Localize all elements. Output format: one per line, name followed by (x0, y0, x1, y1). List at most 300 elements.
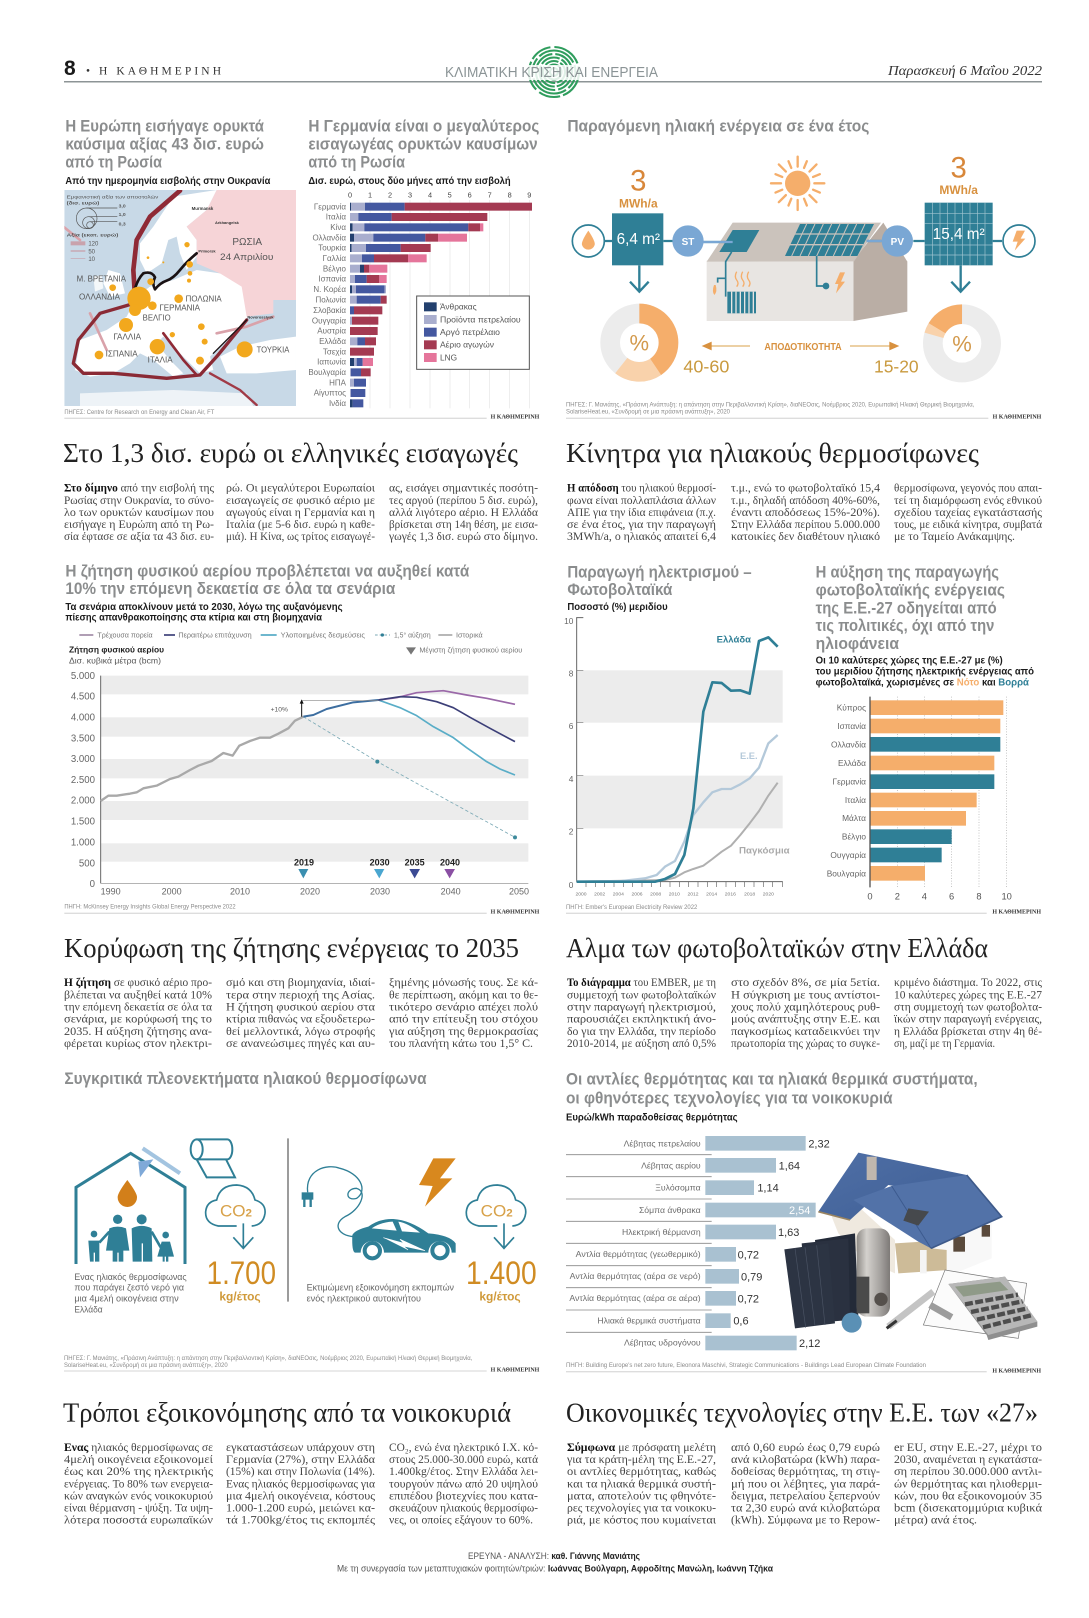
body text: ματα, αποτελούν τις φθηνότε- (567, 1490, 716, 1502)
line chart: 2010 (669, 891, 680, 897)
map: ΤΟΥΡΚΙΑ (257, 344, 290, 354)
headline: Οικονομικές τεχνολογίες στην Ε.Ε. των «27» (566, 1398, 1038, 1428)
bar chart: Βέλγιο (842, 831, 866, 841)
icon: lightning (1003, 225, 1035, 257)
value: 1.700 kg/year (207, 1255, 276, 1304)
body text: κών αναγκών ενός νοικοκυριού (64, 1490, 213, 1502)
map: ΓΑΛΛΙΑ (113, 331, 141, 341)
stacked bar chart: Γαλλία (323, 254, 346, 263)
line chart: 4.500 (71, 692, 95, 703)
bar chart: Ουγγαρία (830, 850, 866, 860)
heading: εισαγωγέας ορυκτών καυσίμων (308, 134, 538, 153)
footer: credit and rule: Η ΚΑΘΗΜΕΡΙΝΗ (491, 1367, 539, 1374)
body text: 2010-2014, με αύξηση από 0,5% (567, 1038, 716, 1050)
line chart: 2018 (744, 891, 755, 897)
body text: τες αργού (περίπου 5 δισ. ευρώ), (389, 495, 538, 507)
body text: δειγμα, πετρελαίου ξεπερνούν (731, 1490, 880, 1502)
headline: Κορύφωση της ζήτησης ενέργειας το 2035 (64, 933, 519, 963)
bar chart: Ολλανδία (831, 739, 866, 749)
line chart: 4.000 (71, 713, 95, 724)
caption: Ενας ηλιακός θερμοσίφωνας (74, 1272, 187, 1282)
footer: credit and rule: Η ΚΑΘΗΜΕΡΙΝΗ (992, 1368, 1041, 1375)
body text: Ρωσίας στην Ουκρανία, το σύνο- (64, 495, 214, 507)
bar chart: 1,64 (779, 1160, 800, 1172)
map: 24 Απριλίου (220, 252, 273, 262)
arrow (951, 265, 970, 292)
heading: καύσιμα αξίας 43 δισ. ευρώ (65, 134, 264, 153)
icon: house with family (76, 1148, 185, 1264)
article: household savings (63, 1398, 538, 1526)
line chart: 4 (569, 774, 574, 784)
subheading: Δισ. ευρώ, στους δύο μήνες από την εισβολή (308, 176, 511, 187)
icon: PV badge (882, 225, 913, 257)
legend: Αέριο αγωγών (440, 340, 494, 350)
body text: παρουσιάζει εκπληκτική άνο- (567, 1014, 716, 1026)
icon: ST badge (672, 225, 704, 257)
footer: credit and rule: Η ΚΑΘΗΜΕΡΙΝΗ (993, 414, 1041, 421)
bar chart: Λέβητας πετρελαίου (624, 1138, 701, 1148)
caption (307, 1283, 454, 1304)
line chart: 2000 (162, 887, 182, 897)
bar chart: Αντλία θερμότητας (αέρα σε αέρα) (569, 1293, 701, 1303)
stacked bar chart: Τσεχία (323, 347, 346, 356)
stacked bar chart: ΗΠΑ (329, 378, 347, 387)
legend: Ιστορικά (456, 631, 483, 639)
donut chart (599, 302, 680, 383)
caption: ενός ηλεκτρικού αυτοκινήτου (307, 1294, 421, 1304)
left column: solar thermal: 40-60 (683, 356, 729, 376)
body text: τ.μ., ενώ το φωτοβολταϊκό 15,4 (731, 483, 880, 495)
body text: σε ένα έτος, για την παραγωγή (567, 519, 716, 531)
heading: Παραγωγή ηλεκτρισμού – (567, 563, 752, 582)
left column: solar thermal (572, 165, 733, 383)
body text: έναντι αποδόσεως 15%-20%). (731, 507, 880, 519)
body text: την επόμενη δεκαετία σε όλα τα (64, 1002, 212, 1014)
caption: Ελλάδα (74, 1305, 103, 1315)
stacked bar chart: Ν. Κορέα (313, 285, 346, 294)
collector area: 6,4 m² (617, 231, 660, 248)
heading: από τη Ρωσία (65, 152, 163, 171)
body text: ών θερμότητας και ηλιοθερμι- (894, 1478, 1042, 1490)
collector area: 15,4 m² (933, 226, 985, 243)
line chart: 2014 (706, 891, 717, 897)
bar chart: Ελλάδα (838, 758, 866, 768)
credits (337, 1551, 773, 1574)
value: 1.400 kg/year (466, 1255, 537, 1304)
body text: ΑΠΕ για την ίδια επιφάνεια (π.χ. (567, 507, 716, 519)
heading (65, 117, 265, 171)
series labels: Ελλάδα (717, 634, 751, 644)
body text: er EU, στην Ε.Ε.-27, μέχρι το (894, 1442, 1042, 1454)
map: Μ. ΒΡΕΤΑΝΙΑ (77, 274, 126, 284)
right column: photovoltaic (867, 151, 1035, 383)
body text: Η ζήτηση σε φυσικό αέριο προ- (64, 976, 212, 989)
bar chart: Σόμπα άνθρακα (639, 1205, 701, 1215)
body text (567, 976, 1042, 1050)
heading: Φωτοβολταϊκά (567, 580, 673, 599)
headline: Στο 1,3 δισ. ευρώ οι ελληνικές εισαγωγές (63, 438, 518, 468)
body text: με το Ταμείο Ανάκαμψης. (894, 531, 1015, 543)
source: SolariseHeat.eu, «Συνδρομή σε μια πράσινη ανάπτυξη», 2020 (64, 1362, 228, 1369)
body text: ενέργειας. Το 80% των ενεργεια- (64, 1478, 213, 1490)
peak markers: 2035 (405, 858, 425, 868)
stacked bar chart: 0 (348, 190, 352, 199)
bar chart (566, 1136, 830, 1350)
body text: αλλά λιγότερο αέριο. Η Ελλάδα (389, 507, 538, 519)
body text (64, 1442, 538, 1526)
body text (567, 482, 1042, 543)
map: 0,3 (119, 221, 126, 227)
body text: πρωτοπορία της χώρας το συγκε- (731, 1038, 880, 1050)
body text: Ιταλία (με 5-6 δισ. ευρώ η καθε- (226, 519, 375, 531)
headline: Αλμα των φωτοβολταϊκών στην Ελλάδα (566, 933, 988, 963)
subheading: Από την ημερομηνία εισβολής στην Ουκρανία (65, 176, 271, 187)
body text: τικότερο σενάριο απέχει πολύ (389, 1002, 538, 1014)
line chart: 2 (569, 827, 574, 837)
source: ΠΗΓΗ: Building Europe's net zero future, Eleonora Maschivi, Strategic Communications - Buildings Lead European Climate Foundation (566, 1363, 926, 1369)
panel: cheapest technologies for households (566, 1069, 1041, 1375)
map: ΟΛΛΑΝΔΙΑ (79, 291, 120, 301)
stacked bar chart: 6 (468, 190, 472, 199)
heading: τις πολιτικές, όχι από την (816, 616, 994, 635)
icon: CO2 cloud and arrow (left): CO2 (220, 1202, 252, 1221)
body text: στο σχεδόν 8%, σε μία 5ετία. (731, 977, 880, 989)
caption: που παράγει ζεστό νερό για (74, 1283, 184, 1293)
body text: βρίσκεται στη 14η θέση, με εισα- (389, 519, 538, 531)
body text: 1.400kg/έτος. Στην Ελλάδα λει- (389, 1466, 538, 1478)
body text: φωνα είναι πολλαπλάσια άλλων (567, 495, 716, 507)
line chart (71, 671, 529, 897)
bar chart: 0,6 (733, 1316, 749, 1328)
heading: από τη Ρωσία (308, 152, 406, 171)
legend: Προϊόντα πετρελαίου (440, 314, 521, 324)
legend: Περαιτέρω επιτάχυνση (178, 631, 252, 639)
efficiency arrows: ΑΠΟΔΟΤΙΚΟΤΗΤΑ (764, 342, 842, 353)
body text: (kWh). Σύμφωνα με το Repow- (731, 1514, 880, 1526)
body text: για τα κράτη-μέλη της Ε.Ε.-27, (566, 1454, 716, 1466)
line chart: 2.000 (71, 796, 95, 807)
body text: σκευάζουν ηλιακούς θερμοσίφω- (389, 1502, 538, 1514)
body text: μή που οι λέβητες, για παρά- (731, 1478, 880, 1490)
body text (64, 976, 538, 1050)
legend: Αργό πετρέλαιο (440, 327, 500, 337)
map: Murmansk (192, 206, 214, 211)
stacked bar chart: Ιταλία (326, 213, 346, 222)
heading: 10% την επόμενη δεκαετία σε όλα τα σενάρια (65, 579, 396, 598)
bar chart: 8 (976, 891, 982, 901)
body text: κτίρια πιθανώς να εξουδετερω- (226, 1014, 375, 1026)
body text: η Ελλάδα βρίσκεται στην 4η θέ- (894, 1026, 1042, 1038)
value: 1.700 kg/year: kg/έτος (219, 1290, 261, 1304)
value: 3 MWh/a (939, 151, 978, 197)
body text: τουργούν πάνω από 20 υψηλού (389, 1478, 538, 1490)
value: 3 MWh/a: MWh/a (939, 183, 978, 197)
bar chart: Λέβητας υδρογόνου (624, 1338, 701, 1348)
body text: για αύξηση της θερμοκρασίας (388, 1026, 538, 1038)
body text: γωγές 1,3 δισ. ευρώ στο δίμηνο. (388, 531, 538, 543)
panel: electricity from photovoltaics line chart (564, 563, 1041, 916)
value: 3 MWh/a: 3 (951, 151, 967, 184)
axis title: Δισ. κυβικά μέτρα (bcm) (69, 655, 161, 665)
stacked bar chart (308, 190, 532, 408)
map: (δισ. ευρώ) (67, 201, 100, 207)
map: Εμφανιστική αξία των αποστολών (67, 193, 159, 200)
body text: κριμένο διάστημα. Το 2022, στις (894, 977, 1042, 989)
donut chart (922, 303, 1002, 383)
source: ΠΗΓΕΣ: Γ. Μανιάτης, «Πράσινη Ανάπτυξη: η απάντηση στην Περιβαλλοντική Κρίση», διαΝΕΟσις, Νοέμβριος 2020, Ευρωπαϊκή Ηλιακή Θερμική Βιομηχανία, (566, 402, 975, 409)
newspaper name: • Η ΚΑΘΗΜΕΡΙΝΗ (86, 66, 221, 78)
body text: σε ανανεώσιμες πηγές και αυ- (226, 1038, 375, 1050)
line chart: 1990 (101, 887, 121, 897)
body text: αγωγούς είναι η Γερμανία και η (226, 507, 375, 519)
stacked bar chart: 8 (508, 190, 512, 199)
bar chart: 1,63 (778, 1227, 799, 1239)
body text (64, 482, 538, 543)
body text: έως και 20% της ηλεκτρικής (64, 1466, 213, 1478)
stacked bar chart: Πολωνία (315, 295, 346, 304)
body text: Η ζήτηση φυσικού αερίου στα (226, 1002, 375, 1014)
body text: 2030, αναμένεται η εγκατάστα- (894, 1454, 1042, 1466)
body text: μια 4μελή οικογένεια, κόστους (226, 1490, 375, 1502)
line chart: 2040 (441, 887, 461, 897)
bar chart: Ξυλόσομπα (655, 1183, 701, 1193)
stacked bar chart: Βέλγιο (323, 264, 347, 273)
value: 1.700 kg/year: 1.700 (207, 1255, 276, 1291)
body text: μέτρα) ανά έτος. (894, 1514, 977, 1526)
line chart: 2002 (594, 891, 605, 897)
body text: θε περίπτωση, ακόμη και το θε- (389, 989, 538, 1001)
body text: ανά κιλοβατώρα (kWh) παρα- (731, 1454, 880, 1466)
body text: κών, που θα εξοικονομούν 35 (894, 1490, 1042, 1502)
body text: 10 καλύτερες χώρες της Ε.Ε.-27 (894, 989, 1042, 1001)
heading: Η αύξηση της παραγωγής (816, 563, 999, 582)
source: SolariseHeat.eu, «Συνδρομή σε μια πράσινη ανάπτυξη», 2020 (566, 408, 731, 415)
credits: Με τη συνεργασία των μεταπτυχιακών φοιτητών/τριών: Ιωάννας Βούλγαρη, Αφροδίτης Μανώλη, Ιωάννη Τζήκα (337, 1564, 773, 1574)
footer: credit and rule: Η ΚΑΘΗΜΕΡΙΝΗ (992, 909, 1041, 916)
icon: solar collector roll (191, 1139, 235, 1177)
icon: CO2 cloud and arrow (left) (206, 1185, 265, 1248)
line chart: 3.500 (71, 733, 95, 744)
series labels: Παγκόσμια (739, 845, 790, 855)
line chart: 2000 (575, 891, 587, 897)
body text: Το διάγραμμα του EMBER, με τη (567, 976, 716, 989)
page number: 8 (64, 57, 76, 80)
stacked bar chart: Αυστρία (317, 327, 346, 336)
subheading: Τα σενάρια αποκλίνουν μετά το 2030, λόγω της αυξανόμενης (65, 602, 343, 613)
body text: Ενας ηλιακός θερμοσίφωνας για (226, 1478, 375, 1490)
body text: (15%) και στην Πολωνία (14%). (226, 1466, 375, 1478)
bar chart: 0,72 (738, 1249, 759, 1261)
heading: οι φθηνότερες τεχνολογίες για τα νοικοκυριά (566, 1088, 893, 1107)
value: 3 MWh/a: 3 (630, 165, 646, 198)
bar chart: 1,14 (757, 1183, 779, 1195)
heading: Οι αντλίες θερμότητας και τα ηλιακά θερμικά συστήματα, (566, 1069, 978, 1088)
legend: Άνθρακας (440, 302, 477, 312)
line chart: 2016 (725, 891, 736, 897)
page header (64, 47, 1042, 97)
map (63, 190, 296, 406)
bar chart: 2,32 (808, 1138, 830, 1150)
stacked bar chart: 7 (488, 190, 492, 199)
bar chart: Βουλγαρία (827, 868, 866, 878)
map: 120 (88, 242, 99, 248)
bar chart: 2 (895, 891, 900, 901)
body text: ριά, με κόστος που κυμαίνεται (567, 1514, 717, 1526)
body text: μούς ανάπτυξης στην Ε.Ε. και (731, 1014, 881, 1026)
body text: ση, μαζί με τη Γερμανία. (894, 1038, 995, 1050)
subheading: Οι 10 καλύτερες χώρες της Ε.Ε.-27 με (%) (816, 655, 1003, 666)
body text: οι αντλίες θερμότητας, καθώς (567, 1466, 716, 1478)
bar chart (827, 697, 1012, 901)
footer: credit and rule: Η ΚΑΘΗΜΕΡΙΝΗ (491, 414, 539, 421)
bar chart: Ισπανία (837, 721, 866, 731)
map: Αξία (εκατ. ευρώ) (67, 233, 119, 239)
stacked bar chart: Σλοβακία (313, 306, 346, 315)
bar chart: Μάλτα (842, 813, 866, 823)
icon: PV badge: PV (891, 237, 904, 248)
icon: sun (771, 157, 824, 210)
stacked bar chart: Ισπανία (318, 275, 346, 284)
icon: lightning (419, 1158, 456, 1207)
stacked bar chart: Ελλάδα (319, 337, 346, 346)
subheading (65, 602, 343, 624)
map: 1,0 (119, 212, 126, 218)
caption: Εκτιμώμενη εξοικονόμηση εκπομπών (307, 1283, 454, 1293)
legend: Τρέχουσα πορεία (97, 631, 153, 639)
footer: credit and rule: Η ΚΑΘΗΜΕΡΙΝΗ (491, 909, 539, 916)
line chart: 2030 (370, 887, 390, 897)
heading (65, 562, 470, 598)
bar chart: 2,54 (789, 1205, 810, 1217)
subheading: φωτοβολταϊκά, χωρισμένες σε Νότο και Βορρά (816, 678, 1030, 689)
body text: ϊκών στην παραγωγή ενέργειας, (893, 1014, 1042, 1026)
body text: στους 25.000-30.000 ευρώ, κατά (389, 1454, 538, 1466)
source: ΠΗΓΗ: McKinsey Energy Insights Global Energy Perspective 2022 (64, 904, 236, 910)
body text: Η απόδοση του ηλιακού θερμοσί- (567, 482, 716, 495)
map: Primorsk (198, 248, 216, 253)
body text: bcm (δισεκατομμύρια κυβικά (894, 1502, 1042, 1514)
subheading: Ευρώ/kWh παραδοθείσας θερμότητας (566, 1113, 738, 1124)
stacked bar chart: 5 (448, 190, 452, 199)
stacked bar chart: Κίνα (330, 223, 346, 232)
icon: CO2 cloud and arrow (right) (466, 1185, 526, 1248)
series labels: Ε.Ε. (740, 751, 758, 761)
body text: CO₂, ενώ ένα ηλεκτρικό Ι.Χ. κό- (389, 1442, 538, 1454)
line chart: 2004 (613, 891, 624, 897)
body text: εισήγαγε η Ευρώπη από τη Ρω- (64, 519, 214, 531)
stacked bar chart: 4 (428, 190, 432, 199)
stacked bar chart: Βουλγαρία (308, 368, 346, 377)
map: ΒΕΛΓΙΟ (143, 313, 171, 323)
body text: μιά). Η Κίνα, ως τρίτος εισαγωγέ- (226, 531, 375, 543)
article: economical technologies in the EU-27 (566, 1398, 1042, 1526)
line chart: 2.500 (71, 775, 95, 786)
body text: στην παραγωγή ηλεκτρισμού, (567, 1002, 716, 1014)
heading: Παραγόμενη ηλιακή ενέργεια σε ένα έτος (567, 117, 869, 136)
body text: σχεδίου ταχείας εγκατάστασής (894, 507, 1042, 519)
panel: top 10 EU countries photovoltaic share (816, 563, 1034, 901)
peak markers: 2019 (294, 858, 314, 868)
stacked bar chart: 2 (388, 190, 392, 199)
body text: Στο δίμηνο από την εισβολή της (64, 482, 214, 495)
bar chart: 0,79 (741, 1271, 762, 1283)
legend: LNG (440, 352, 457, 362)
body text: επιπέδου βιοτεχνίες που κατα- (389, 1490, 538, 1502)
+10% arrow (271, 699, 378, 717)
efficiency arrows (702, 342, 899, 353)
line chart: 3.000 (71, 754, 95, 765)
body text: ση περίπου 30.000.000 αντλι- (894, 1466, 1042, 1478)
bar chart: Ιταλία (845, 795, 866, 805)
body text: τερα στην περιοχή της Ασίας. (226, 989, 375, 1001)
body text: συμμετοχή των φωτοβολταϊκών (567, 989, 716, 1001)
arrow (630, 265, 649, 292)
body text: κατοικίες δεν διαθέτουν ηλιακό (731, 531, 880, 543)
map: 50 (88, 249, 96, 255)
body text: από την επίτευξη του στόχου (389, 1014, 538, 1026)
line chart: 2020 (300, 887, 320, 897)
line chart: 6 (569, 721, 574, 731)
headline: Τρόποι εξοικονόμησης από τα νοικοκυριά (63, 1398, 511, 1428)
body text: σενάρια, με κορύφωσή της το (64, 1014, 212, 1026)
body text: 4μελή οικογένεια εξοικονομεί (64, 1454, 214, 1466)
legend: Υλοποιημένες δεσμεύσεις (281, 631, 366, 639)
heading: φωτοβολταϊκής ενέργειας (816, 581, 1005, 600)
subheading (816, 655, 1034, 689)
body text: Ενας ηλιακός θερμοσίφωνας σε (64, 1442, 213, 1454)
map: ΠΟΛΩΝΙΑ (186, 294, 222, 304)
stacked bar chart: Ουγγαρία (312, 316, 346, 325)
body text: τα 2,30 ευρώ ανά κιλοβατώρα (731, 1502, 880, 1514)
legend (79, 631, 483, 639)
illustration: house, solar panels, tank and calculator (784, 1153, 1037, 1340)
peak markers (294, 858, 460, 878)
body text: Γερμανία (27%), στην Ελλάδα (226, 1454, 375, 1466)
line chart: 1.000 (71, 838, 95, 849)
bar chart: Αντλία θερμότητας (αέρα σε νερό) (570, 1271, 701, 1281)
heading: Συγκριτικά πλεονεκτήματα ηλιακού θερμοσίφωνα (64, 1069, 427, 1088)
body text: του πλανήτη κάτω του 1,5° C. (389, 1038, 533, 1050)
axis title: Ζήτηση φυσικού αερίου (69, 645, 164, 655)
icon: ST badge: ST (682, 237, 694, 248)
bar chart: 10 (1001, 891, 1012, 901)
body text: στη συμμετοχή των φωτοβολτα- (894, 1002, 1042, 1014)
bar chart: 6 (949, 891, 954, 901)
stacked bar chart: Ινδία (329, 399, 346, 408)
body text: και τα ηλιακά θερμικά συστή- (567, 1478, 716, 1490)
series labels (717, 634, 790, 855)
map: Arkhangelsk (215, 220, 240, 225)
body text: δοθείσας θερμότητας, τη στιγ- (731, 1466, 880, 1478)
house illustration (707, 223, 907, 321)
line chart: 500 (79, 858, 95, 869)
+10% arrow: +10% (271, 707, 288, 714)
stacked bar chart: Γερμανία (314, 202, 346, 211)
bar chart: Κύπρος (837, 703, 866, 713)
icon: electric car (352, 1219, 456, 1258)
article: incentives for solar water heaters (566, 438, 1042, 543)
panel: solar energy produced in a year (566, 117, 1041, 421)
line chart (564, 616, 790, 897)
heading: ηλιοφάνεια (816, 634, 900, 653)
body text: τεί τη διαμόρφωση ενός εθνικού (894, 495, 1042, 507)
body text: 1.000-1.200 ευρώ, μειώνει κα- (226, 1502, 375, 1514)
panel: natural gas demand chart (64, 562, 539, 916)
icon: water drop (572, 225, 604, 257)
section title: ΚΛΙΜΑΤΙΚΗ ΚΡΙΣΗ ΚΑΙ ΕΝΕΡΓΕΙΑ (445, 65, 658, 81)
credits: ΕΡΕΥΝΑ - ΑΝΑΛΥΣΗ: καθ. Γιάννης Μανιάτης (468, 1551, 640, 1561)
body text: παγκοσμίως καταδεικνύει την (731, 1026, 880, 1038)
